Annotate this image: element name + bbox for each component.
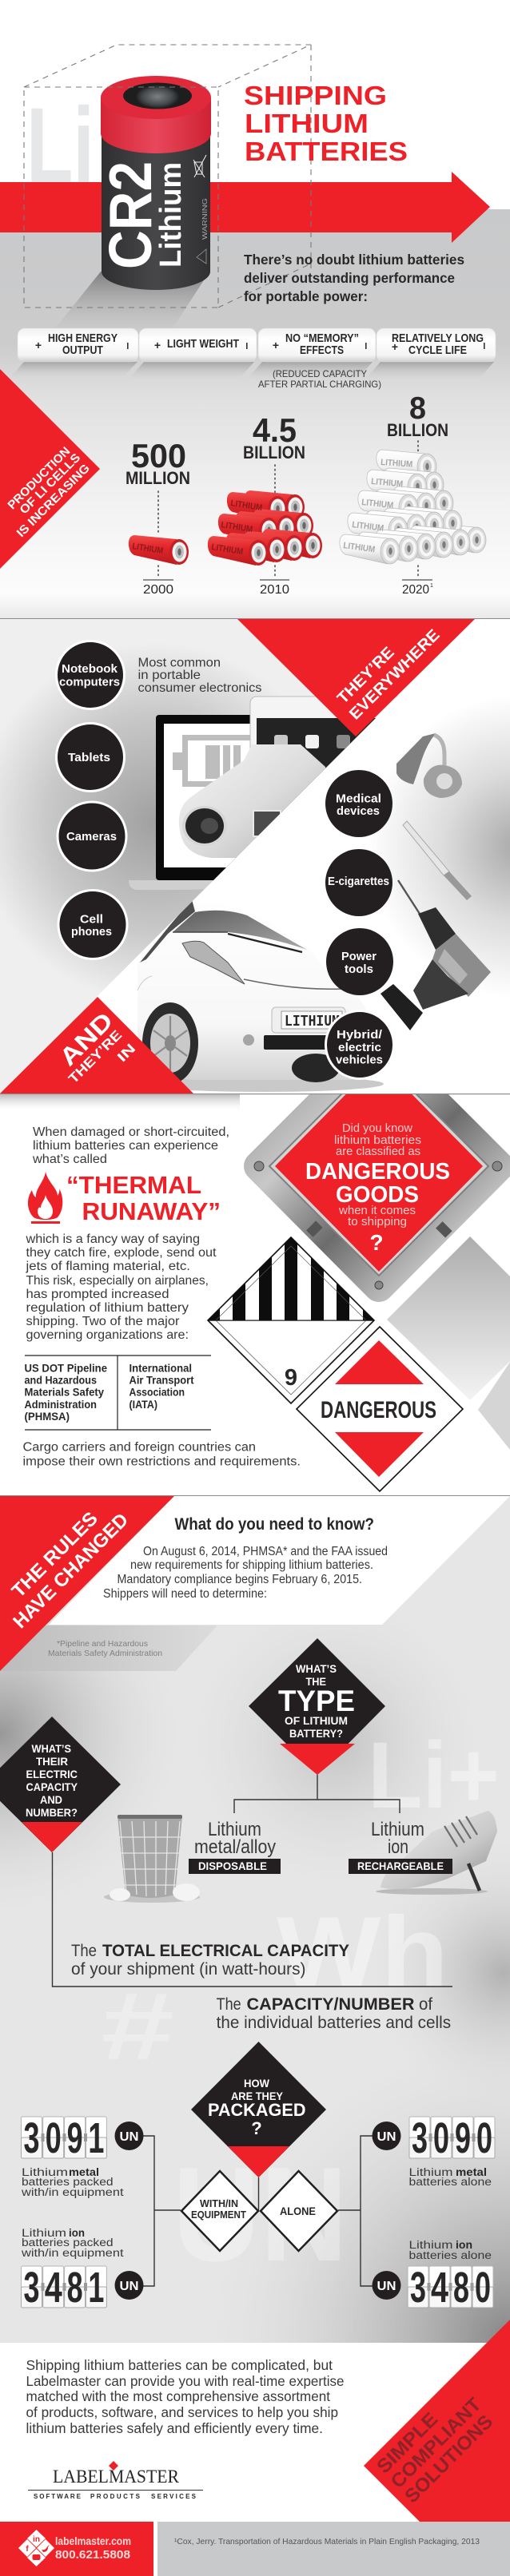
arrow bbox=[0, 172, 490, 243]
counter: UN 3091: 1 bbox=[88, 2114, 104, 2162]
battery benefit: long cycle life: RELATIVELY LONG bbox=[392, 331, 484, 345]
badge: power tools bbox=[326, 928, 393, 995]
counter: UN 3480 bbox=[408, 2264, 493, 2312]
corner label: and they're in: AND bbox=[54, 1007, 118, 1071]
counter: UN 3091: 0 bbox=[46, 2114, 62, 2162]
placard: dangerous goods: ? bbox=[369, 1230, 384, 1255]
placard: dangerous goods: lithium batteries bbox=[334, 1133, 421, 1147]
option: alone bbox=[261, 2171, 337, 2251]
battery benefit: long cycle life bbox=[377, 328, 496, 362]
counter: UN 3480: 8 bbox=[453, 2264, 469, 2312]
counter: UN 3481: 3 bbox=[24, 2264, 40, 2312]
2020 column: LITHIUM bbox=[361, 498, 394, 510]
logo: labelmaster: PRODUCTS bbox=[90, 2493, 141, 2500]
counter: UN 3481: 4 bbox=[45, 2264, 62, 2312]
callout: most common: Most common bbox=[137, 657, 221, 669]
label: 3090: metal bbox=[456, 2166, 487, 2178]
2020 column: 2020 bbox=[402, 583, 429, 597]
panel: thermal runaway bbox=[0, 1094, 510, 1492]
callout: most common bbox=[137, 657, 262, 695]
intro text: deliver outstanding performance bbox=[244, 270, 455, 286]
decision: packaging: HOW bbox=[244, 2077, 270, 2090]
table: organizations: Association bbox=[129, 1386, 185, 1399]
heading: What do you need to know? bbox=[174, 1515, 374, 1534]
placard: dangerous goods: DANGEROUS bbox=[305, 1159, 450, 1185]
battery benefit: long cycle life: + bbox=[392, 340, 398, 353]
text: total electrical capacity bbox=[71, 1942, 349, 1979]
label: class 9 hazard: 9 bbox=[285, 1365, 297, 1391]
decision: battery type: WHAT’S bbox=[296, 1662, 337, 1675]
badge: UN right bottom bbox=[373, 2271, 401, 2300]
decision: capacity and number bbox=[0, 1717, 121, 1852]
panel: what do you need to know bbox=[0, 1496, 510, 1671]
panel: production chart bbox=[0, 369, 510, 619]
table: organizations: Materials Safety bbox=[24, 1386, 104, 1399]
explanation text: has prompted increased bbox=[26, 1288, 169, 1301]
social icons: f bbox=[26, 2545, 29, 2554]
ghost letters Li: Li bbox=[26, 86, 94, 205]
badge: UN right bottom: UN bbox=[377, 2280, 396, 2293]
2000 column: 2000 bbox=[143, 583, 173, 597]
red corner label: OF LI CELLS bbox=[17, 451, 83, 517]
option: lithium ion: RECHARGEABLE bbox=[357, 1860, 444, 1872]
footer contact bbox=[0, 2522, 153, 2576]
battery photo bbox=[97, 76, 211, 290]
closing text: Labelmaster can provide you with real-time expertise bbox=[26, 2373, 344, 2389]
background diamonds bbox=[387, 1236, 510, 1450]
badge: medical devices: devices bbox=[337, 804, 380, 818]
capacity note: AFTER PARTIAL CHARGING) bbox=[258, 379, 381, 390]
cargo text: Cargo carriers and foreign countries can bbox=[22, 1441, 256, 1455]
2020 column bbox=[340, 391, 486, 597]
2010 column: 2010 bbox=[260, 583, 289, 597]
text: capacity number bbox=[217, 1995, 451, 2032]
2000 column bbox=[126, 437, 190, 597]
table: organizations: (PHMSA) bbox=[24, 1410, 70, 1423]
placard: dangerous goods: when it comes bbox=[338, 1204, 416, 1217]
2020 column: 8 bbox=[409, 391, 426, 426]
badge: hybrid electric vehicles: electric bbox=[338, 1041, 381, 1054]
battery benefit: no memory effects: + bbox=[273, 339, 279, 351]
label: 3091 bbox=[21, 2166, 124, 2198]
badge: UN left bottom bbox=[115, 2271, 144, 2300]
option: with/in equipment: EQUIPMENT bbox=[191, 2209, 246, 2221]
rules text bbox=[103, 1545, 388, 1601]
explanation text bbox=[25, 1232, 217, 1342]
heading: thermal runaway: RUNAWAY” bbox=[82, 1197, 221, 1225]
table: organizations bbox=[24, 1355, 211, 1430]
badge: UN left bottom: UN bbox=[120, 2280, 139, 2293]
battery photo: Lithium bbox=[154, 162, 188, 268]
label: 3090 bbox=[409, 2166, 492, 2188]
label: 3481: batteries packed bbox=[22, 2237, 114, 2249]
2010 column: LITHIUM bbox=[211, 542, 244, 557]
label: 3480: Lithium bbox=[409, 2239, 452, 2251]
text: capacity number: CAPACITY/NUMBER bbox=[246, 1995, 414, 2014]
2020 column: LITHIUM bbox=[343, 541, 376, 555]
battery benefit: no memory effects bbox=[258, 328, 376, 362]
battery benefit: high energy output bbox=[18, 328, 138, 362]
option: lithium metal bbox=[189, 1819, 281, 1874]
2020 column: LITHIUM bbox=[371, 477, 404, 489]
option: lithium ion: Lithium bbox=[371, 1819, 424, 1840]
footer contact: labelmaster.com bbox=[55, 2534, 131, 2547]
table: organizations: (IATA) bbox=[129, 1398, 157, 1411]
panel: rules background bbox=[0, 1495, 510, 2343]
counter: UN 3480: 0 bbox=[475, 2264, 491, 2312]
corner label: they're everywhere: EVERYWHERE bbox=[346, 626, 444, 724]
intro text: for portable power: bbox=[244, 288, 368, 304]
badge: hybrid electric vehicles: vehicles bbox=[336, 1053, 383, 1067]
explanation text: they catch fire, explode, send out bbox=[26, 1246, 217, 1260]
corner label: they're everywhere bbox=[237, 619, 475, 736]
footer source: ¹Cox, Jerry. Transportation of Hazardous Materials in Plain English Packaging, 2013 bbox=[174, 2537, 480, 2546]
rules text: Mandatory compliance begins February 6, 2015. bbox=[117, 1573, 362, 1586]
label: 3090: batteries alone bbox=[409, 2176, 492, 2188]
battery benefit: light weight bbox=[139, 328, 257, 362]
title: SHIPPING bbox=[244, 81, 387, 110]
icon: charger bbox=[376, 1811, 497, 1895]
option: alone: ALONE bbox=[280, 2205, 316, 2217]
decision: packaging: ARE THEY bbox=[231, 2090, 284, 2102]
badge: tablets bbox=[56, 724, 125, 791]
corner label: simple compliant solutions bbox=[364, 2320, 510, 2522]
icon: car bbox=[137, 898, 384, 1092]
badge: medical devices bbox=[325, 770, 392, 837]
battery benefit: high energy output: OUTPUT bbox=[62, 343, 103, 357]
closing text: of products, software, and services to help you ship bbox=[26, 2404, 338, 2420]
decision: battery type: BATTERY? bbox=[289, 1727, 343, 1740]
badge: medical devices: Medical bbox=[336, 792, 381, 805]
battery benefit: high energy output: + bbox=[35, 339, 42, 351]
social icons bbox=[18, 2530, 54, 2566]
decision: battery type: TYPE bbox=[278, 1685, 355, 1717]
explanation text: governing organizations are: bbox=[26, 1328, 189, 1342]
footnote: Materials Safety Administration bbox=[48, 1649, 162, 1658]
icon: wastebasket bbox=[104, 1815, 200, 1903]
counter: UN 3481 bbox=[21, 2264, 106, 2312]
decision: capacity and number: THEIR bbox=[36, 1755, 68, 1768]
rules text: new requirements for shipping lithium batteries. bbox=[130, 1558, 373, 1572]
2010 column bbox=[208, 411, 322, 597]
license plate bbox=[272, 1007, 345, 1033]
badge: hybrid electric vehicles bbox=[326, 1011, 393, 1078]
battery benefit: no memory effects: EFFECTS bbox=[300, 343, 344, 357]
connector: capacity bracket bbox=[53, 1852, 452, 1987]
corner label: and they're in: IN bbox=[114, 1041, 138, 1065]
icon: laptop bbox=[129, 715, 257, 890]
decision: battery type bbox=[249, 1638, 385, 1775]
2020 column: LITHIUM bbox=[381, 458, 413, 470]
decision: packaging: PACKAGED bbox=[208, 2100, 305, 2120]
badge: cell phones bbox=[58, 890, 127, 959]
social icons: in bbox=[33, 2535, 40, 2544]
corner label: HAVE CHANGED bbox=[9, 1509, 133, 1633]
footer contact: 800.621.5808 bbox=[55, 2548, 130, 2562]
2020 column: LITHIUM bbox=[352, 520, 384, 534]
counter: UN 3091 bbox=[21, 2114, 106, 2162]
2010 column: 4.5 bbox=[253, 411, 297, 449]
panel: closing bbox=[0, 2320, 510, 2576]
option: with/in equipment: WITH/IN bbox=[200, 2197, 238, 2209]
intro text: what’s called bbox=[32, 1153, 107, 1166]
decision: capacity and number: NUMBER? bbox=[26, 1806, 78, 1819]
closing text bbox=[26, 2357, 344, 2436]
badge: UN left top: UN bbox=[120, 2130, 139, 2144]
icon: camera bbox=[179, 744, 326, 858]
badge: cameras bbox=[58, 802, 126, 871]
text: total electrical capacity: of your shipment (in watt-hours) bbox=[71, 1960, 305, 1979]
option: lithium metal: Lithium bbox=[208, 1819, 261, 1840]
capacity note: (REDUCED CAPACITY bbox=[273, 368, 367, 379]
decision: capacity and number: ELECTRIC bbox=[26, 1768, 78, 1780]
cargo text bbox=[22, 1441, 301, 1469]
option: lithium ion bbox=[349, 1819, 452, 1874]
badge: notebook computers: computers bbox=[59, 676, 120, 689]
label: 3481 bbox=[21, 2227, 124, 2259]
corner label: simple compliant solutions: COMPLIANT bbox=[387, 2394, 486, 2493]
badge: tablets: Tablets bbox=[68, 751, 110, 764]
icon: power drill bbox=[381, 880, 491, 1030]
icon: flame bbox=[28, 1172, 62, 1224]
text: capacity number: the individual batteries and cells bbox=[217, 2014, 451, 2032]
2020 column: BILLION bbox=[387, 420, 448, 440]
counter: UN 3090: 0 bbox=[476, 2114, 492, 2162]
intro text bbox=[32, 1125, 229, 1166]
capacity note bbox=[258, 368, 381, 390]
label: 3091: with/in equipment bbox=[21, 2186, 124, 2198]
corner label: and they're in: THEY’RE bbox=[66, 1027, 125, 1086]
counter: UN 3480: 3 bbox=[410, 2264, 426, 2312]
ghost letters: UN bbox=[173, 2139, 348, 2289]
callout: most common: consumer electronics bbox=[137, 681, 262, 695]
intro text bbox=[244, 252, 464, 304]
placard: dangerous goods: Did you know bbox=[342, 1121, 412, 1135]
badge: e-cigarettes: E-cigarettes bbox=[328, 875, 389, 888]
red corner label: PRODUCTION bbox=[5, 444, 73, 512]
ghost letters: # bbox=[101, 1973, 174, 2080]
ghost letters: Li+ bbox=[368, 1723, 500, 1828]
corner label: simple compliant solutions: SOLUTIONS bbox=[400, 2411, 497, 2507]
label: 3480: ion bbox=[456, 2239, 472, 2251]
red corner label: IS INCREASING bbox=[14, 462, 93, 540]
2000 column: LITHIUM bbox=[132, 542, 164, 556]
rules text: On August 6, 2014, PHMSA* and the FAA issued bbox=[143, 1545, 388, 1558]
counter: UN 3480: 4 bbox=[431, 2264, 448, 2312]
table: organizations: Air Transport bbox=[129, 1374, 194, 1387]
battery shadow bbox=[55, 272, 209, 328]
2000 column: 500 bbox=[131, 437, 186, 474]
badge: power tools: Power bbox=[341, 950, 377, 963]
explanation text: jets of flaming material, etc. bbox=[25, 1260, 190, 1273]
label: 3480: batteries alone bbox=[409, 2249, 492, 2261]
badge: UN right top: UN bbox=[377, 2130, 396, 2144]
badge: notebook computers: Notebook bbox=[62, 662, 118, 676]
footnote bbox=[48, 1639, 162, 1658]
badge: UN left top bbox=[115, 2122, 144, 2150]
heading: thermal runaway: “THERMAL bbox=[66, 1171, 201, 1199]
decision: capacity and number: CAPACITY bbox=[26, 1780, 78, 1793]
closing text: Shipping lithium batteries can be complicated, but bbox=[26, 2357, 333, 2373]
counter: UN 3091: 9 bbox=[67, 2114, 83, 2162]
corner label: THE RULES bbox=[8, 1508, 102, 1602]
placard: dangerous goods bbox=[254, 1046, 502, 1289]
logo: labelmaster bbox=[28, 2461, 203, 2500]
badge: notebook computers bbox=[56, 641, 125, 709]
icon: hearing aid bbox=[396, 733, 462, 798]
explanation text: shipping. Two of the major bbox=[26, 1315, 179, 1328]
counter: UN 3481: 1 bbox=[88, 2264, 104, 2312]
dashed box bbox=[24, 45, 311, 308]
license plate: LITHIUM bbox=[285, 1013, 340, 1030]
option: lithium metal: metal/alloy bbox=[194, 1836, 276, 1858]
placard: dangerous goods: are classified as bbox=[336, 1145, 420, 1158]
red corner label bbox=[0, 369, 100, 569]
counter: UN 3090: 9 bbox=[455, 2114, 471, 2162]
decision: battery type: THE bbox=[305, 1675, 326, 1688]
text: capacity number: The bbox=[217, 1995, 241, 2014]
heading: thermal runaway bbox=[66, 1171, 221, 1225]
dotted leaders bbox=[158, 441, 418, 578]
placard: dangerous goods: GOODS bbox=[336, 1182, 419, 1208]
explanation text: which is a fancy way of saying bbox=[25, 1232, 200, 1246]
title: LITHIUM bbox=[245, 109, 369, 138]
table: organizations: and Hazardous bbox=[24, 1374, 97, 1387]
counter: UN 3090: 0 bbox=[433, 2114, 449, 2162]
intro text: lithium batteries can experience bbox=[33, 1139, 218, 1153]
table: organizations: International bbox=[129, 1362, 192, 1375]
2000 column: MILLION bbox=[126, 468, 190, 488]
counter: UN 3481: 8 bbox=[67, 2264, 83, 2312]
label: 3091: batteries packed bbox=[22, 2176, 114, 2188]
icon: e-cigarette bbox=[403, 821, 472, 900]
label: class 9 hazard bbox=[208, 1237, 375, 1403]
explanation text: This risk, especially on airplanes, bbox=[26, 1274, 209, 1288]
icon: tablet bbox=[249, 697, 398, 843]
2010 column: LITHIUM bbox=[230, 498, 263, 513]
capsule shadows bbox=[8, 362, 494, 382]
decision: packaging: ? bbox=[251, 2118, 262, 2138]
badge: hybrid electric vehicles: Hybrid/ bbox=[337, 1028, 383, 1042]
closing text: matched with the most comprehensive assortment bbox=[26, 2388, 330, 2404]
ghost letters bbox=[101, 1723, 500, 2289]
decision: battery type: OF LITHIUM bbox=[285, 1714, 348, 1727]
table: organizations: US DOT Pipeline bbox=[24, 1362, 107, 1375]
badge: cell phones: Cell bbox=[80, 912, 103, 927]
battery photo: WARNING bbox=[201, 198, 209, 240]
option: lithium metal: DISPOSABLE bbox=[198, 1860, 267, 1872]
badge: UN right top bbox=[373, 2122, 401, 2150]
footer source bbox=[157, 2522, 510, 2576]
counter: UN 3091: 3 bbox=[24, 2114, 40, 2162]
decision: capacity and number: AND bbox=[40, 1793, 62, 1806]
devices: laptop, tablet, camera bbox=[129, 697, 410, 890]
title bbox=[244, 81, 408, 166]
label: 3480 bbox=[409, 2239, 492, 2261]
badge: cell phones: phones bbox=[71, 925, 112, 939]
label: dangerous: DANGEROUS bbox=[321, 1397, 436, 1423]
connector: type branches bbox=[234, 1775, 400, 1813]
footnote: *Pipeline and Hazardous bbox=[57, 1639, 148, 1649]
rules text: Shippers will need to determine: bbox=[103, 1587, 267, 1601]
2010 column: BILLION bbox=[243, 443, 305, 462]
battery benefit: no memory effects: NO “MEMORY” bbox=[285, 331, 359, 345]
text: total electrical capacity: The bbox=[71, 1942, 97, 1960]
callout: most common: in portable bbox=[137, 669, 201, 682]
badge: cameras: Cameras bbox=[66, 830, 117, 843]
intro text: When damaged or short-circuited, bbox=[33, 1125, 229, 1139]
counter: UN 3090 bbox=[409, 2114, 495, 2162]
badge: e-cigarettes bbox=[325, 849, 392, 916]
logo: labelmaster: SOFTWARE bbox=[34, 2493, 82, 2500]
2020 column: 1 bbox=[430, 583, 433, 589]
battery benefit: light weight: LIGHT WEIGHT bbox=[167, 337, 239, 351]
corner label: they're everywhere: THEY’RE bbox=[334, 644, 398, 708]
2010 column: LITHIUM bbox=[221, 520, 253, 534]
option: with/in equipment bbox=[181, 2171, 258, 2251]
counter: UN 3090: 3 bbox=[412, 2114, 428, 2162]
connectors: packaging bbox=[143, 2136, 373, 2286]
label: 3481: with/in equipment bbox=[21, 2247, 124, 2259]
decision: capacity and number: WHAT’S bbox=[32, 1742, 71, 1755]
ghost letters: Wh bbox=[277, 1895, 448, 2008]
label: 3091: Lithium bbox=[22, 2166, 68, 2178]
battery benefit: high energy output: HIGH ENERGY bbox=[48, 331, 118, 345]
logo: labelmaster: LABELMASTER bbox=[53, 2467, 180, 2487]
cargo text: impose their own restrictions and requirements. bbox=[22, 1455, 301, 1469]
badge: power tools: tools bbox=[345, 963, 373, 976]
decision: packaging bbox=[191, 2042, 326, 2177]
label: 3481: ion bbox=[69, 2227, 85, 2239]
text: capacity number: of bbox=[419, 1995, 432, 2014]
explanation text: regulation of lithium battery bbox=[26, 1301, 189, 1315]
battery photo: CR2 bbox=[97, 161, 164, 269]
closing text: lithium batteries safely and efficiently every time. bbox=[26, 2420, 323, 2436]
placard: dangerous goods: to shipping bbox=[348, 1215, 407, 1228]
corner label: and they're in bbox=[0, 997, 193, 1094]
label: dangerous bbox=[297, 1327, 463, 1491]
label: 3090: Lithium bbox=[409, 2166, 452, 2178]
corner label: simple compliant solutions: SIMPLE bbox=[373, 2408, 442, 2478]
option: lithium ion: ion bbox=[388, 1836, 408, 1858]
corner label bbox=[0, 1496, 174, 1671]
table: organizations: Administration bbox=[24, 1398, 97, 1411]
label: 3481: Lithium bbox=[22, 2227, 66, 2239]
label: 3091: metal bbox=[69, 2166, 99, 2178]
logo: labelmaster: SERVICES bbox=[151, 2493, 197, 2500]
panel: intro bbox=[0, 45, 510, 618]
intro text: There’s no doubt lithium batteries bbox=[244, 252, 464, 268]
battery benefit: long cycle life: CYCLE LIFE bbox=[408, 343, 467, 357]
battery benefit: light weight: + bbox=[154, 339, 161, 351]
text: total electrical capacity: TOTAL ELECTRICAL CAPACITY bbox=[102, 1942, 349, 1960]
panel: everywhere background bbox=[0, 619, 510, 1094]
title: BATTERIES bbox=[245, 137, 408, 166]
